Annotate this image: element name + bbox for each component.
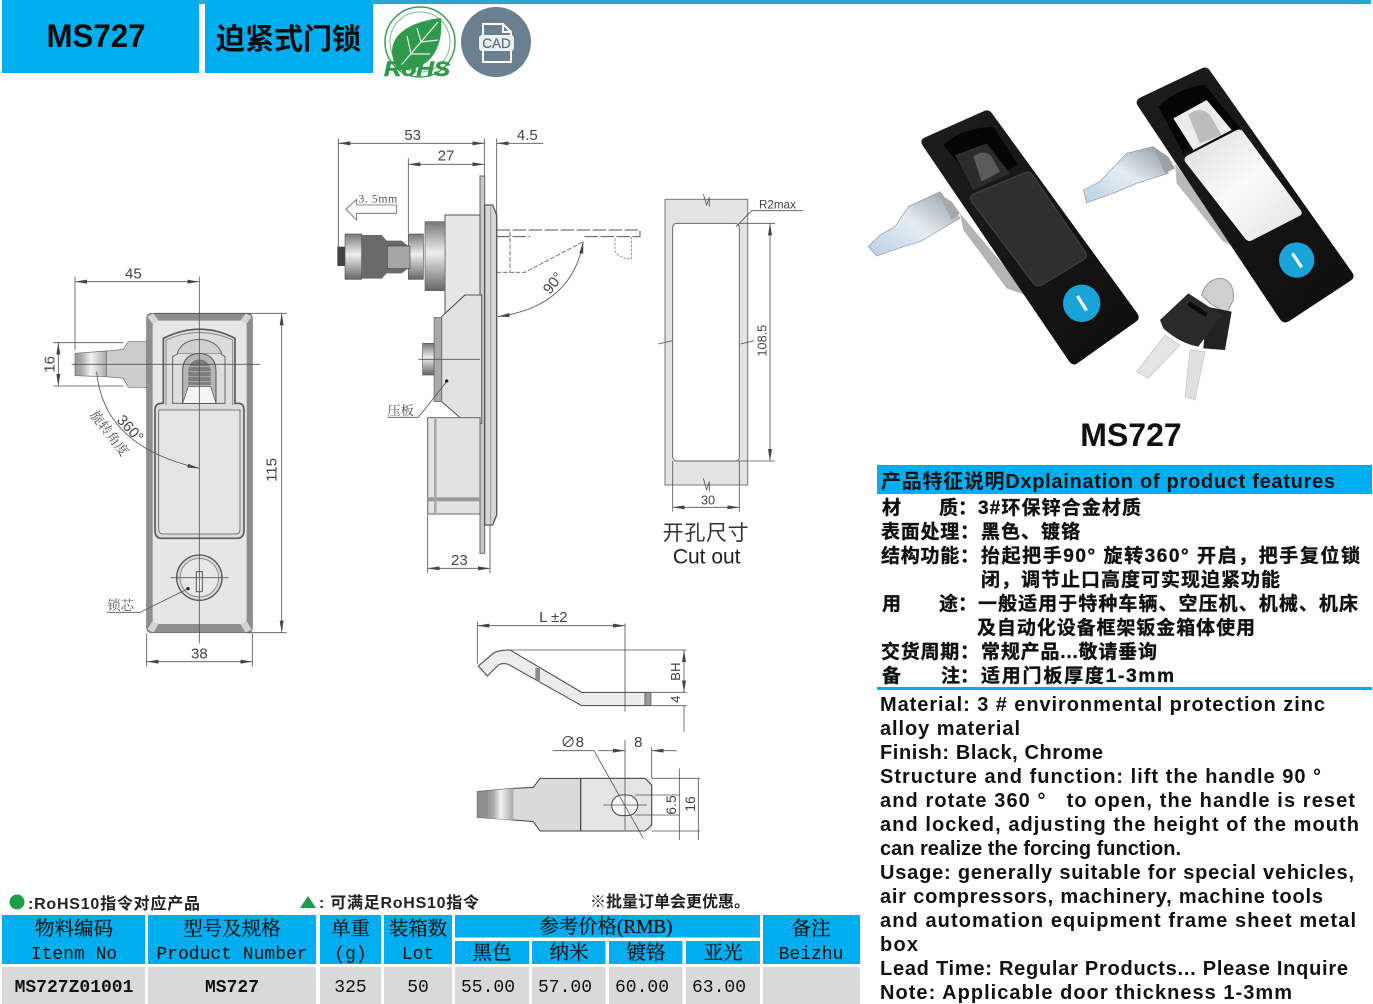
lever side profile xyxy=(478,650,651,706)
table data row values: 325 xyxy=(334,978,367,998)
Chinese specification list: 黑色、镀铬 xyxy=(981,520,1080,543)
price table xyxy=(2,915,860,1004)
table header labels: 纳米 xyxy=(549,942,589,964)
dimension: 16: 16 xyxy=(42,356,59,373)
title badge: product name: 迫紧式门锁 xyxy=(216,23,361,56)
label: lock core xyxy=(107,589,187,613)
product name caption: MS727 xyxy=(1080,417,1182,453)
Chinese specification list xyxy=(881,496,1360,687)
dimension: 38 xyxy=(147,645,252,662)
table header labels: Beizhu xyxy=(779,945,843,965)
dimension: 8: 8 xyxy=(634,734,643,751)
dimension: 27 xyxy=(408,148,484,165)
table header labels: 亚光 xyxy=(703,942,743,964)
table header labels: Itenm No xyxy=(31,945,117,965)
table header labels: 装箱数 xyxy=(389,918,447,940)
dimension: 53: 53 xyxy=(404,127,421,144)
table header labels: Product Number xyxy=(156,945,308,965)
Chinese specification list: 用 xyxy=(882,594,901,615)
drawing: lever detail xyxy=(477,609,700,840)
dimension: 6.5: 6.5 xyxy=(663,795,679,815)
dimension: L ±2: L ±2 xyxy=(539,609,568,626)
legend row: ※批量订单会更优惠。 xyxy=(590,892,750,911)
Chinese specification list: 材 xyxy=(882,497,901,519)
English specification list: Finish: Black, Chrome xyxy=(880,742,1103,764)
dimension: 4.5: 4.5 xyxy=(517,127,538,144)
table data row values xyxy=(15,978,746,998)
English specification list: alloy material xyxy=(880,718,1020,740)
English specification list xyxy=(880,694,1359,1004)
dimension: 108.5: 108.5 xyxy=(756,325,770,357)
dimension: 45: 45 xyxy=(125,265,142,282)
arrow: 3.5mm travel xyxy=(346,192,398,220)
rotation note xyxy=(87,372,199,468)
panel heading: 产品特征说明Dxplaination of product features xyxy=(881,470,1335,493)
Chinese specification list: 及自动化设备框架钣金箱体使用 xyxy=(977,616,1255,639)
Chinese specification list: 结构功能： xyxy=(881,545,979,567)
dimension: diameter 8: ∅8 xyxy=(561,734,584,751)
English specification list: and automation equipment frame sheet metal xyxy=(880,910,1356,932)
table header cells xyxy=(2,915,860,964)
English specification list: box xyxy=(880,934,918,956)
English specification list: Material: 3 # environmental protection zinc xyxy=(880,694,1325,716)
lifted handle, dashed xyxy=(497,230,640,272)
dimension: 16 xyxy=(682,778,698,840)
table data row cells xyxy=(2,967,860,1004)
English specification list: air compressors, machinery, machine tools xyxy=(880,886,1323,908)
caption: cut out xyxy=(663,522,749,569)
dimension: 27: 27 xyxy=(438,148,454,165)
title badge: model: MS727 xyxy=(46,18,146,54)
Chinese specification list: 注： xyxy=(941,665,979,687)
panel: product features xyxy=(877,465,1372,1004)
Chinese specification list: 途： xyxy=(939,592,977,615)
dimension: 38: 38 xyxy=(191,645,208,662)
icon: CAD file xyxy=(461,7,531,77)
table header labels: 备注 xyxy=(791,918,831,940)
dimension: 45 xyxy=(75,265,199,282)
Chinese specification list: 常规产品...敬请垂询 xyxy=(981,641,1157,663)
right chrome lock xyxy=(1083,68,1354,322)
panel heading xyxy=(877,465,1372,494)
table header labels: Lot xyxy=(402,945,434,965)
Chinese specification list: 3#环保锌合金材质 xyxy=(978,496,1141,519)
label: R2max xyxy=(736,198,803,227)
legend row xyxy=(10,892,750,913)
table data row values: 63.00 xyxy=(692,978,746,998)
Chinese specification list: 备 xyxy=(882,665,901,687)
table data row values: 55.00 xyxy=(461,978,515,998)
title badge: model xyxy=(2,0,199,73)
dimension: 8 xyxy=(598,734,677,751)
table data row values: MS727Z01001 xyxy=(15,978,134,998)
Chinese specification list: 表面处理： xyxy=(881,521,979,543)
icon: RoHS leaf xyxy=(384,7,455,81)
label: pressure plate xyxy=(387,379,448,418)
panel with opening xyxy=(658,194,754,492)
English specification list: Structure and function: lift the handle 90 ° xyxy=(880,766,1321,788)
drawing: side view xyxy=(337,127,640,573)
rotation note: 旋转角度 xyxy=(87,407,132,459)
English specification list: and rotate 360 ° to open, the handle is reset xyxy=(880,790,1355,812)
table header labels: 黑色 xyxy=(472,942,512,964)
dimension: BH: BH xyxy=(668,662,683,681)
flange and body xyxy=(428,176,497,553)
Chinese specification list: 一般适用于特种车辆、空压机、机械、机床 xyxy=(978,592,1358,615)
table data row values: 60.00 xyxy=(615,978,669,998)
table header labels: 参考价格(RMB) xyxy=(540,916,672,938)
angle: 90 degrees xyxy=(498,242,583,317)
dimension: 30 xyxy=(673,493,739,507)
drawing: cut out xyxy=(658,194,803,569)
label: pressure plate: 压板 xyxy=(387,402,414,418)
label: lock core: 锁芯 xyxy=(107,597,135,613)
dimension: diameter 8 xyxy=(553,734,643,838)
caption: cut out: 开孔尺寸 xyxy=(663,522,749,545)
shaft and nuts xyxy=(337,222,445,375)
icon: RoHS leaf: RoHS xyxy=(384,58,450,81)
dimension: BH xyxy=(668,650,684,692)
dimension: 23 xyxy=(428,515,490,573)
photo: two locks and keys xyxy=(868,68,1354,400)
table header labels xyxy=(31,916,843,965)
table data row values: 50 xyxy=(407,978,429,998)
Chinese specification list: 适用门板厚度1-3mm xyxy=(981,664,1174,687)
handle recess and pad xyxy=(155,329,244,538)
table header labels: 物料编码 xyxy=(35,918,113,940)
key cylinder xyxy=(177,555,222,600)
Chinese specification list: 交货周期： xyxy=(881,640,979,663)
table header labels: (g) xyxy=(334,945,367,965)
drawing: front view xyxy=(42,265,287,667)
English specification list: can realize the forcing function. xyxy=(880,838,1181,860)
English specification list: Usage: generally suitable for special vehicles, xyxy=(880,862,1354,884)
English specification list: Lead Time: Regular Products... Please Inquire xyxy=(880,958,1348,980)
dimension: 23: 23 xyxy=(451,552,468,569)
caption: cut out: Cut out xyxy=(673,546,741,569)
arrow: 3.5mm travel: 3. 5mm xyxy=(358,192,398,206)
dimension: 115: 115 xyxy=(264,458,281,482)
legend row: :RoHS10指令对应产品 xyxy=(28,894,200,913)
Chinese specification list: 闭，调节止口高度可实现迫紧功能 xyxy=(981,568,1280,591)
dimension: 16: 16 xyxy=(682,796,698,812)
Chinese specification list: 抬起把手90° 旋转360° 开启，把手复位锁 xyxy=(981,544,1360,567)
keys xyxy=(1137,278,1234,400)
top accent bar xyxy=(199,0,1371,4)
lock plate xyxy=(147,313,252,633)
Chinese specification list: 质： xyxy=(939,496,977,519)
table header labels: 型号及规格 xyxy=(183,918,281,940)
table data row values: MS727 xyxy=(205,978,259,998)
table data row values: 57.00 xyxy=(538,978,592,998)
dimension: 4: 4 xyxy=(668,695,683,703)
dimension: 16 xyxy=(42,343,59,386)
table header labels: 镀铬 xyxy=(626,942,666,964)
dimension: 4 xyxy=(668,695,684,732)
left black lock xyxy=(868,110,1139,364)
table header labels: 单重 xyxy=(331,918,370,940)
title badge: product name xyxy=(205,0,373,73)
label: R2max: R2max xyxy=(759,198,796,211)
lever plan view xyxy=(477,778,652,831)
legend row: : 可满足RoHS10指令 xyxy=(319,893,479,912)
dimension: 4.5 xyxy=(497,127,543,144)
dimension: 6.5 xyxy=(663,768,679,840)
dimension: 30: 30 xyxy=(701,493,715,507)
rotation note: 360° xyxy=(113,412,147,446)
icon: CAD file: CAD xyxy=(482,36,511,51)
English specification list: and locked, adjusting the height of the mouth xyxy=(880,814,1359,836)
English specification list: Note: Applicable door thickness 1-3mm xyxy=(880,982,1292,1004)
angle: 90 degrees: 90° xyxy=(540,269,567,297)
handle arm xyxy=(75,342,147,387)
